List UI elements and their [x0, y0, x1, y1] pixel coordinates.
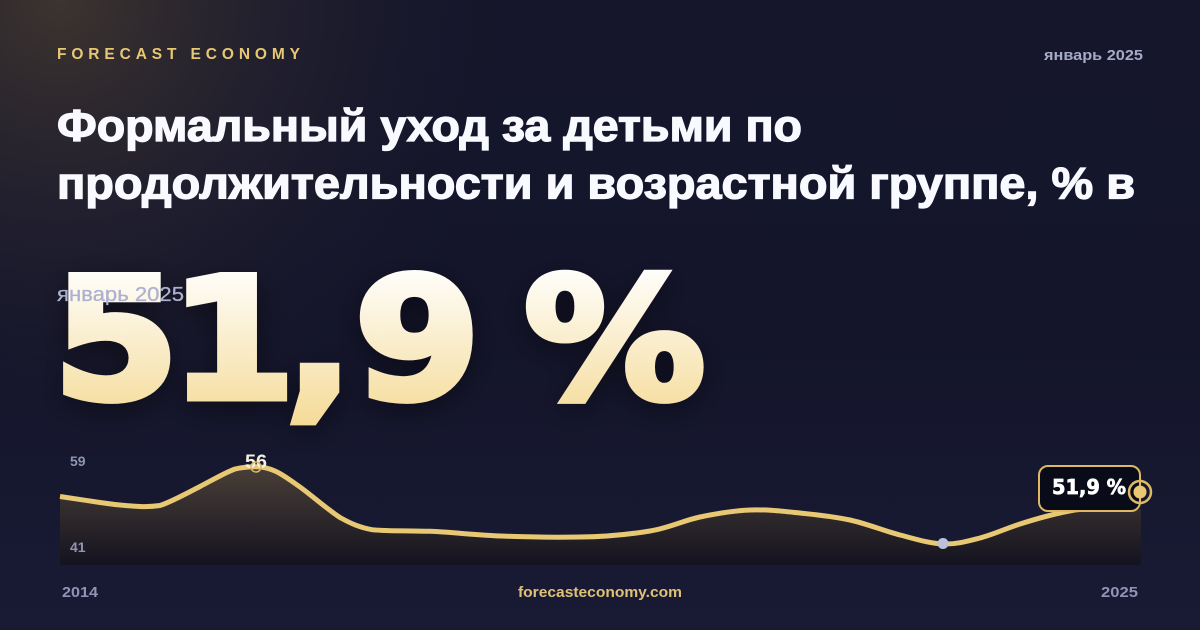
- title: продолжительности и возрастной группе, % в: [57, 160, 1135, 208]
- peak value label: 56: [245, 452, 267, 473]
- minimum marker: [938, 538, 948, 549]
- source site: forecasteconomy.com: [518, 584, 682, 601]
- end point marker: [1129, 481, 1151, 503]
- axis label: 41: 41: [70, 539, 86, 555]
- chart line: [60, 467, 1090, 544]
- peak marker: [251, 462, 261, 472]
- chart area fill: [60, 467, 1141, 565]
- big number: 51,9 %: [53, 243, 706, 438]
- period subtitle over big number: январь 2025: [57, 284, 184, 306]
- axis label: 59: 59: [70, 453, 86, 469]
- title: [57, 102, 1135, 208]
- area line chart: [60, 452, 1141, 565]
- callout: latest value: [1039, 466, 1140, 511]
- date top right: январь 2025: [1044, 47, 1143, 64]
- callout: latest value: 51,9 %: [1052, 475, 1126, 499]
- brand label: FORECAST ECONOMY: [57, 46, 301, 63]
- title: Формальный уход за детьми по: [57, 102, 802, 151]
- end year: 2025: [1101, 584, 1138, 601]
- start year: 2014: [62, 584, 99, 601]
